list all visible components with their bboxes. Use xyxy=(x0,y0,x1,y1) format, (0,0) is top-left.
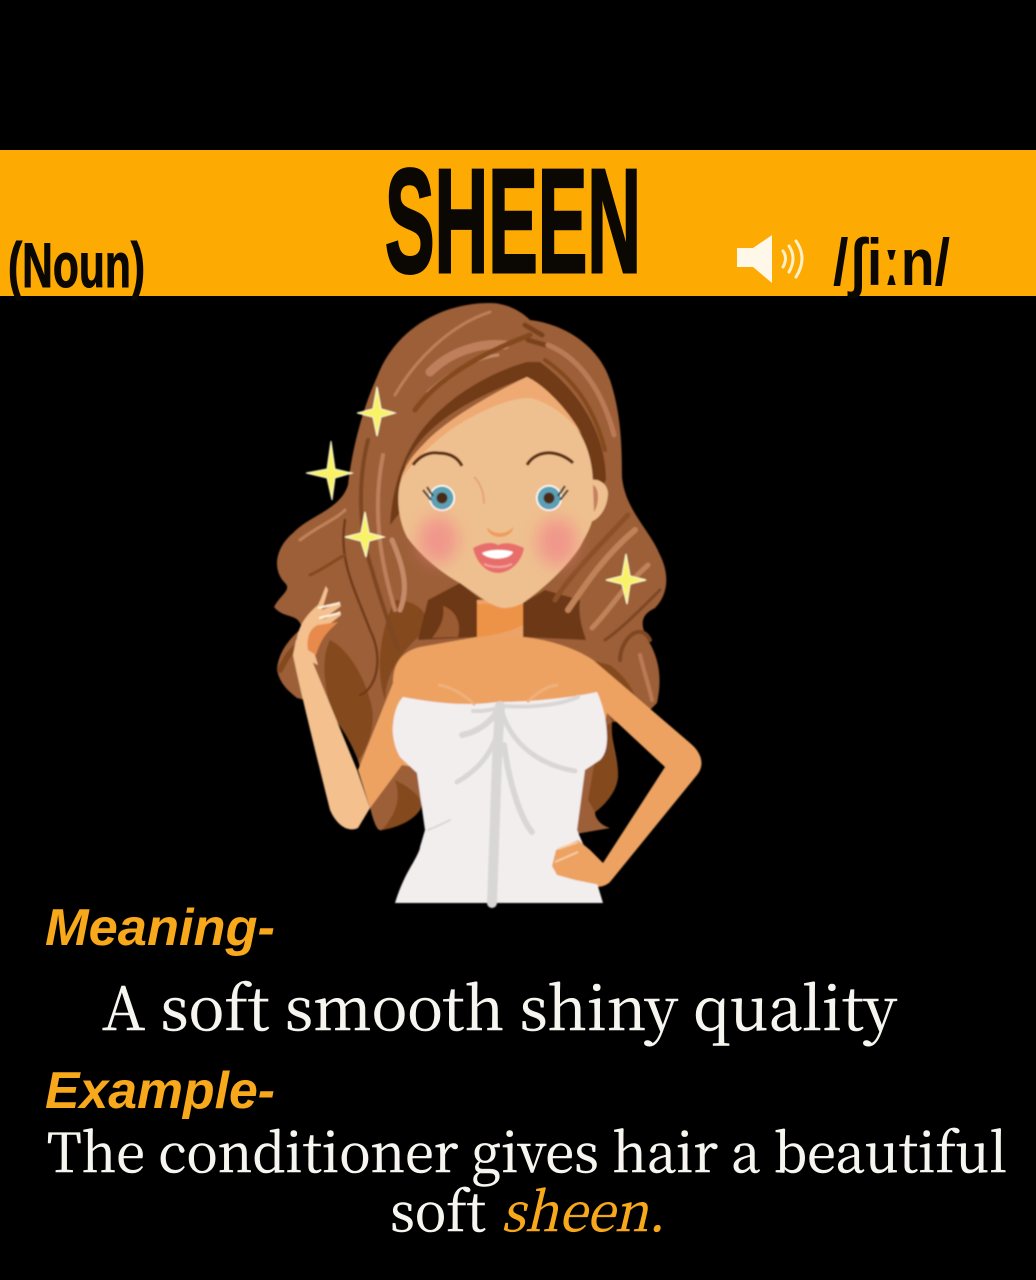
example sentence: The conditioner gives hair a beautiful xyxy=(47,1111,1007,1188)
cheeks xyxy=(418,516,458,564)
part of speech: noun: (Noun) xyxy=(8,231,145,301)
sparkles xyxy=(306,387,646,604)
torso and upper arms xyxy=(358,637,701,887)
neck shadow xyxy=(477,604,523,637)
phonetic transcription: /ʃiːn/ xyxy=(833,225,950,299)
hair shadow at forehead xyxy=(390,362,606,525)
eyes xyxy=(423,485,568,511)
nose xyxy=(474,477,484,504)
example sentence xyxy=(47,1111,1007,1247)
hair strands xyxy=(280,312,660,700)
hair mid-tone waves xyxy=(324,600,640,830)
hand on hip xyxy=(552,840,603,885)
face xyxy=(398,377,593,608)
header band xyxy=(0,139,1036,304)
chest lines xyxy=(438,685,558,705)
neck xyxy=(477,600,523,640)
example sentence: sheen. xyxy=(501,1170,665,1247)
hair back xyxy=(274,303,666,835)
example sentence: soft xyxy=(390,1170,486,1247)
dress xyxy=(393,692,607,903)
label: meaning: Meaning- xyxy=(45,899,275,957)
mouth xyxy=(473,543,524,573)
ear xyxy=(590,480,608,522)
title word: SHEEN xyxy=(385,139,641,304)
hair dark shadow around neck xyxy=(418,583,586,640)
left forearm xyxy=(293,640,370,829)
meaning text: A soft smooth shiny quality xyxy=(102,962,898,1048)
dress folds xyxy=(428,697,578,903)
ear inner xyxy=(593,485,598,512)
raised hand xyxy=(296,586,341,665)
illustration: woman with shiny hair xyxy=(274,303,701,903)
label: example: Example- xyxy=(45,1062,275,1120)
icon: speaker xyxy=(737,235,802,283)
forehead shadow xyxy=(401,377,582,480)
eyebrows xyxy=(413,453,573,466)
